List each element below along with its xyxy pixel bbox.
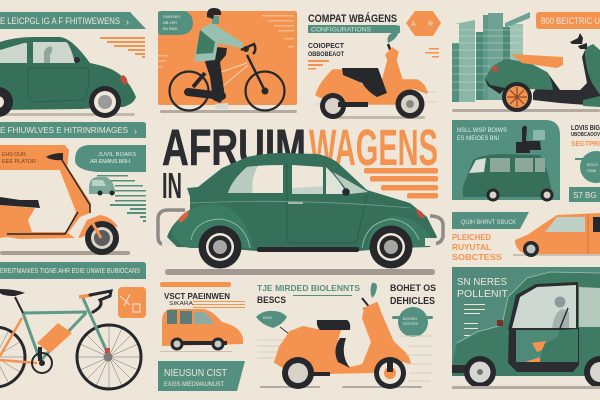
title: AFRUIM [162,119,306,176]
banner: top left [0,12,146,29]
panel: green pod car bottom right [452,267,600,389]
panel: nielson cost [158,361,245,391]
label: orange left: EHS OUR [2,152,26,158]
label: orange left [0,145,69,170]
text block: right column [571,125,600,148]
title: IN [162,165,182,206]
icon: teal circle right [575,151,600,183]
text block: orange list: SOBCTESS [452,253,503,262]
icon: orange hexagon badge: A R [411,21,433,28]
text block: orange list: RUYUTAL [452,243,491,252]
ribbon: quick study [452,212,529,229]
panel: teal mini van left: AR EMANS BRH [90,159,130,165]
skyline: teal buildings [452,12,530,102]
panel: teal mini van left [75,145,146,222]
callout: teal note [158,11,193,35]
callout: teal note: B6 BND [163,26,178,31]
banner: left third: EREITMANIES TIGNE AHR EDIE UNWIE BUBIOCANS [0,268,140,275]
banner: left third [0,262,146,279]
icon: orange badge [118,287,146,318]
panel: nielson cost: NIEUSUN CIST [164,368,227,379]
callout: teal note: SIWENIG [163,14,180,19]
car: orange right [513,213,600,257]
banner: top left: E LEICPGL IG A F FHITIWEWENS [0,16,120,26]
icon: teal circle badge [392,307,433,381]
scooter: bottom center orange [260,283,422,389]
panel: green pod car bottom right: SN NERES [457,277,507,288]
scooter: left orange [0,153,130,255]
title: WAGENS [309,119,438,176]
panel: teal van right: ES NIEIOES BNI [457,136,499,142]
heading block: compact wagens: OBBOBEAOT [308,52,344,58]
heading: vsct preinwen with orange car: SIKARA [169,301,194,307]
heading: vsct preinwen with orange car: VSCT PAEINWEN [164,291,230,301]
heading block: compact wagens: COIOPECT [308,41,344,50]
label: orange top right [536,12,600,29]
stripes: under title [364,168,438,198]
icon: bicycle and rider [160,8,297,113]
icon: teal circle right: BOLS [587,162,598,167]
car: top left green [0,37,136,118]
banner: top left: › [126,17,129,27]
speed stripes: top left [100,37,145,58]
scooter: top right green [452,33,600,112]
label: teal cost right: S7 BG [573,191,597,200]
heading: vsct preinwen with orange car [160,282,245,352]
heading: bohet os dehicles: BOHET OS [390,283,436,294]
heading block: compact wagens: COMPAT WBÁGENS [308,12,397,25]
text block: orange list [452,233,503,262]
icon: teal circle badge: SOTOIS [403,321,418,326]
banner: left second [0,122,146,138]
icon: teal circle right: SEBI [587,168,596,173]
banner: left second: E FHIUWLVES E HITRINRIMAGES [0,125,128,135]
icon: teal circle badge: BOHED [403,316,417,321]
scooter: top center orange [316,25,435,119]
heading: tje mirded with leaf bubble: TJE MIRDED BIOLENNTS [257,283,360,293]
panel: teal mini van left: JUVIL BOARS [98,152,136,158]
icon: pod car [452,272,600,388]
heading: tje mirded with leaf bubble: BESCS [257,295,286,305]
label: teal cost right [569,187,600,202]
label: orange left: EEE PLATOR [2,159,36,165]
icon: orange car [160,309,243,352]
panel: nielson cost: EXISS MIEDWAUNUST [164,382,224,388]
heading: bohet os dehicles: DEHICLES [390,295,435,307]
icon: van [463,154,554,202]
panel: green pod car bottom right: POLLENIT [457,289,508,300]
title [162,119,438,206]
car: central green hero [158,153,443,275]
stripes: near hexagon [425,48,439,58]
bicycle: bottom left [0,289,141,389]
heading block: compact wagens: CONFIGURATIONS [311,28,371,34]
banner: left second: › [134,126,137,136]
heading: tje mirded with leaf bubble: BISE [263,315,272,320]
panel: teal van right [452,120,560,202]
ribbon: quick study: QUIH BHRVT SBUCK [461,220,516,226]
panel: cyclist on orange [158,8,297,113]
panel: teal van right: NSLL WSP BOIWS [457,128,507,134]
text block: orange list: PLEICHED [452,233,491,242]
heading: bohet os dehicles [390,283,436,307]
callout: teal note: NB HIFI [163,20,177,25]
icon: orange hexagon badge [406,11,441,36]
heading: tje mirded with leaf bubble [256,283,360,358]
heading block: compact wagens [308,12,400,70]
